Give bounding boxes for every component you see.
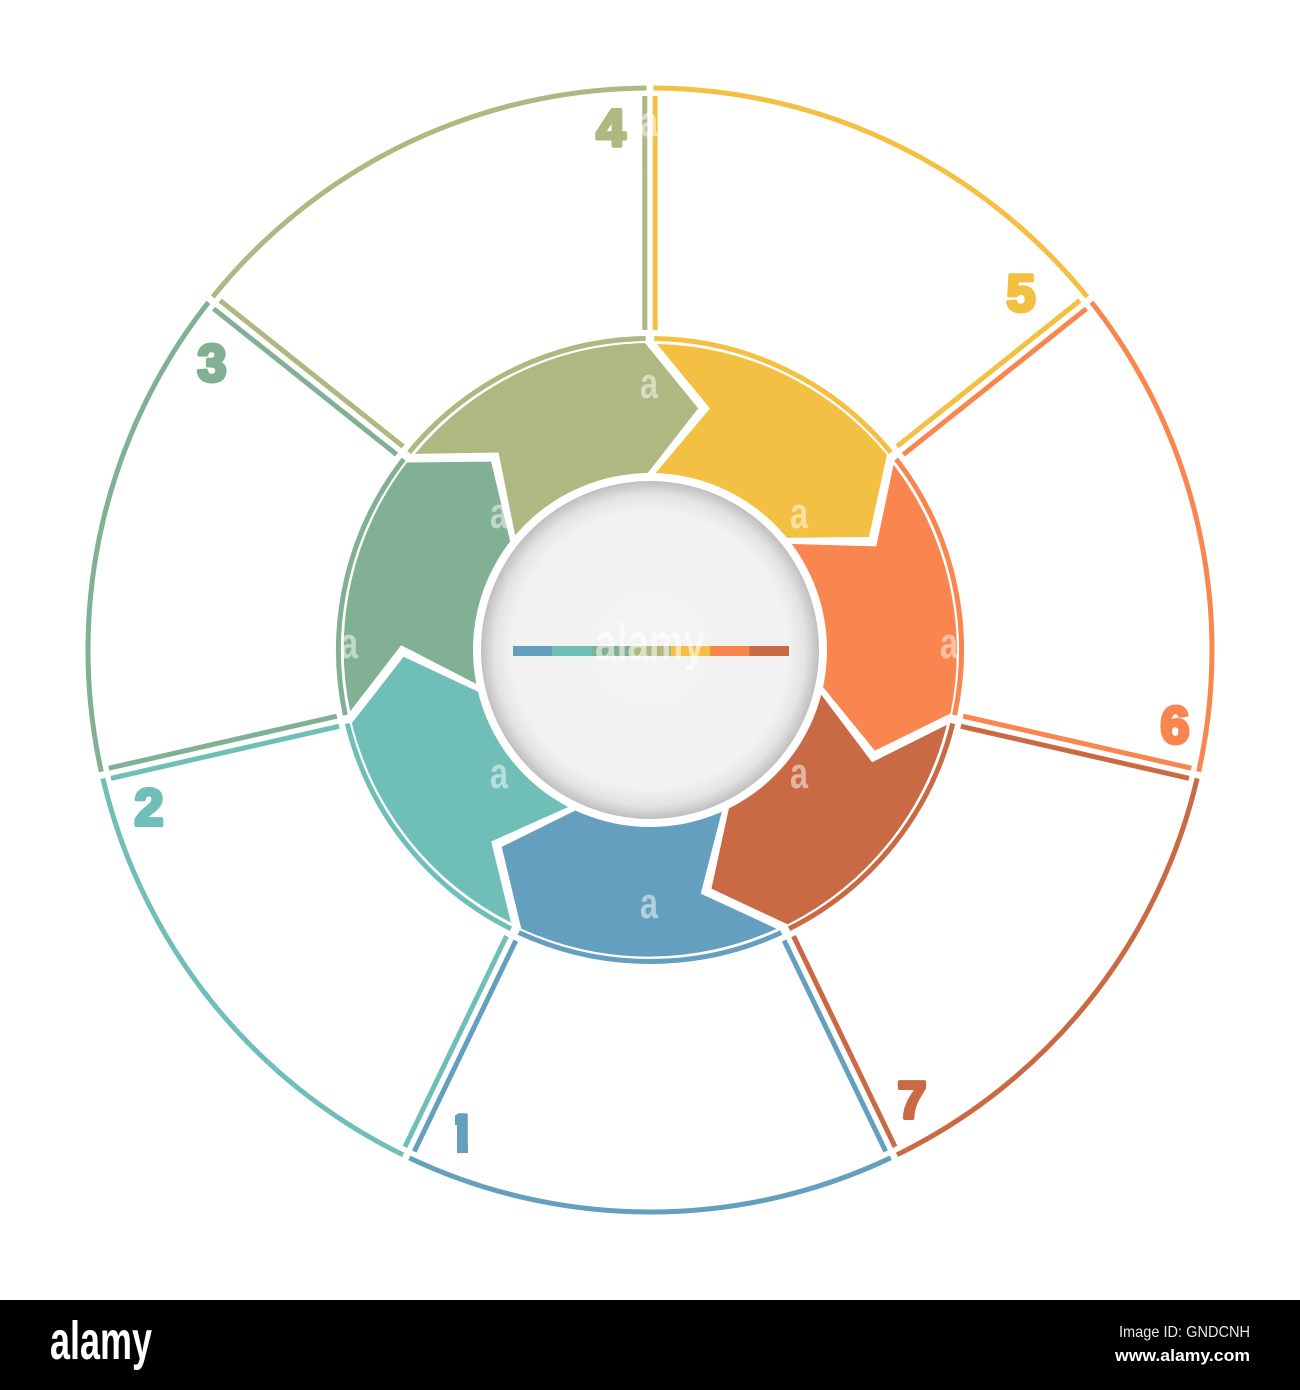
- segment 3: sage green: [5, 249, 541, 775]
- number 3: 3: [198, 335, 226, 393]
- number 6: 6: [1161, 697, 1189, 755]
- footer logo: alamy: [50, 1311, 152, 1371]
- colour bar: [513, 646, 789, 656]
- segment 7: rust: [662, 675, 1198, 1201]
- segment 4: olive: [211, 0, 835, 580]
- number 4: 4: [597, 100, 626, 158]
- number 1: 1: [447, 1105, 475, 1163]
- segment 1: blue: [305, 751, 894, 1346]
- watermark marks: a: [340, 619, 358, 668]
- segment 6: orange: [738, 300, 1300, 922]
- watermark marks: a: [640, 359, 658, 408]
- website: www.alamy.com: [1114, 1346, 1250, 1365]
- footer bar: [0, 1300, 1300, 1390]
- number 2: 2: [135, 779, 163, 837]
- image id: Image ID: GNDCNH: [1119, 1324, 1250, 1341]
- watermark marks: a: [940, 619, 958, 668]
- watermark marks: a: [790, 489, 808, 538]
- number 7: 7: [898, 1072, 926, 1130]
- segment 5: yellow: [650, 88, 1087, 538]
- watermark marks: a: [640, 97, 658, 146]
- watermark marks: alamy: [595, 614, 705, 672]
- watermark marks: a: [490, 749, 508, 798]
- watermark marks: a: [640, 879, 658, 928]
- watermark marks: a: [790, 749, 808, 798]
- watermark marks: [340, 97, 958, 928]
- watermark marks: a: [490, 489, 508, 538]
- centre hub: [473, 473, 827, 827]
- segment 2: teal: [12, 561, 601, 1156]
- number 5: 5: [1007, 265, 1035, 323]
